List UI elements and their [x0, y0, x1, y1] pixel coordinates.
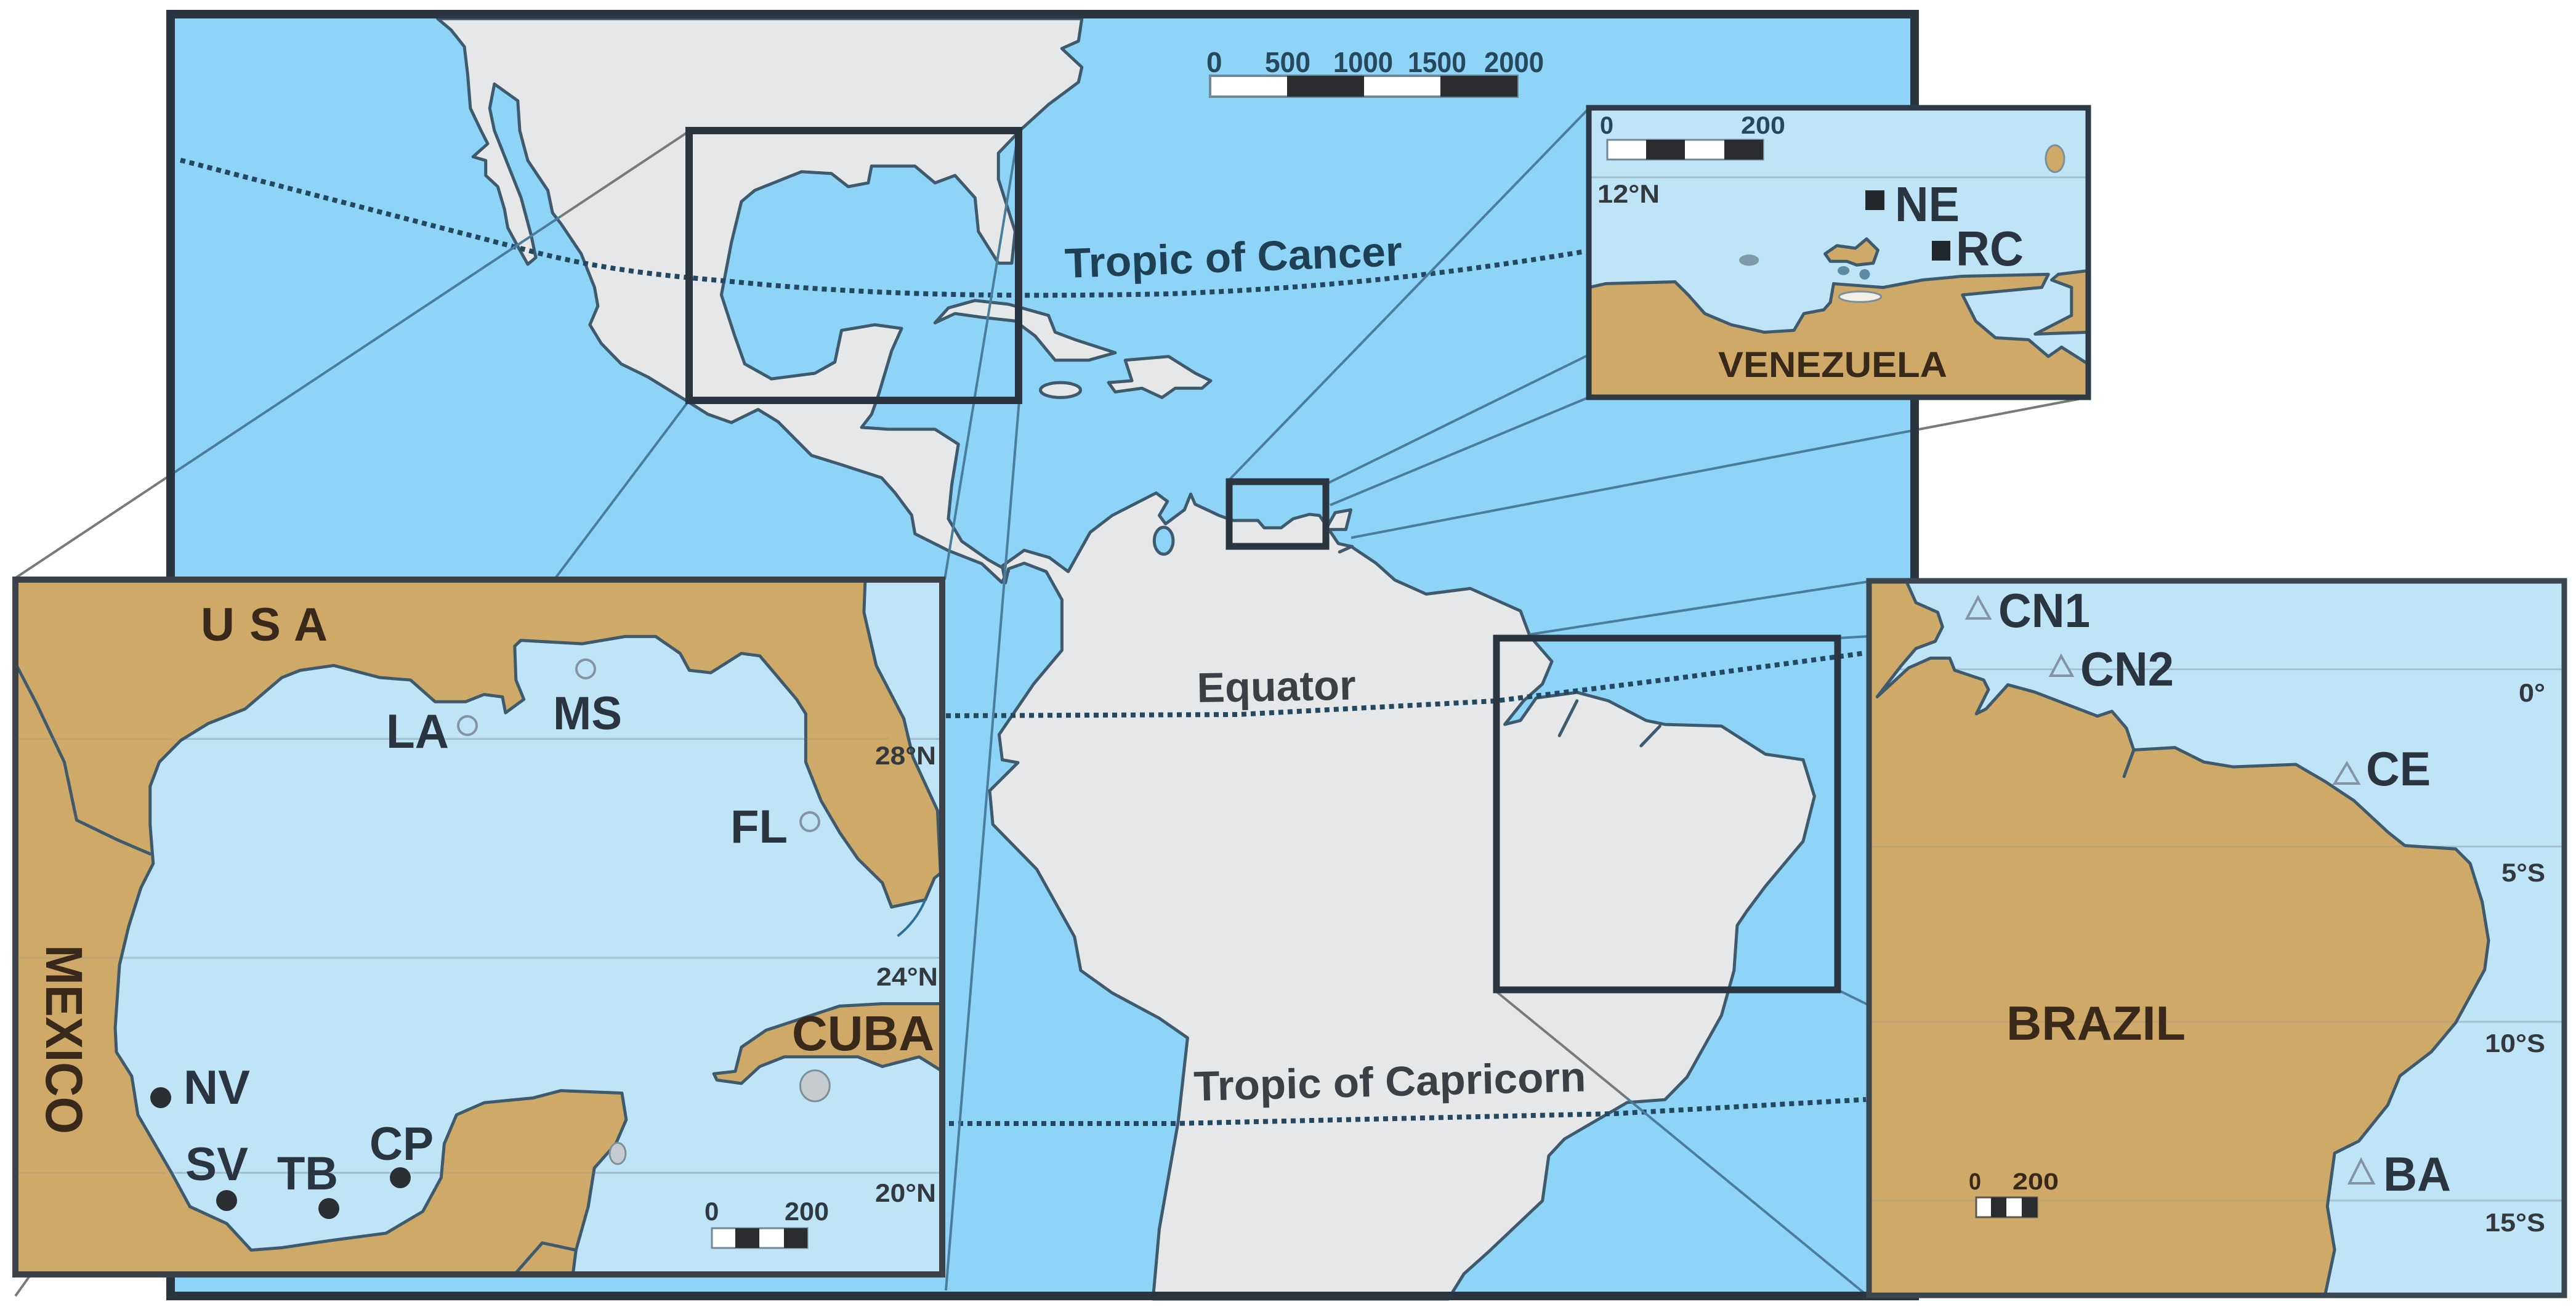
site: CN2: CN2	[2080, 642, 2174, 696]
label: Tropic of Cancer: Tropic of Cancer	[1064, 228, 1403, 287]
scale bar: Venezuela inset: 200	[1741, 112, 1785, 139]
label: Cuba: CUBA	[792, 1006, 934, 1061]
latitude labels: 10°S	[2485, 1029, 2545, 1058]
latitude labels	[875, 741, 938, 1207]
site: BA: BA	[2383, 1147, 2451, 1201]
land: USA, Mexico and Florida	[15, 580, 942, 1274]
tropic of cancer line	[180, 160, 1586, 295]
site: CN1: CN1	[1998, 583, 2090, 638]
latitude labels: 28°N	[875, 741, 936, 770]
scale bar: main map	[1206, 46, 1544, 97]
site: NV	[150, 1060, 250, 1114]
scale bar: main map: 500	[1265, 46, 1310, 78]
site: MS: MS	[553, 687, 622, 740]
panel: main map ocean	[171, 14, 1915, 1296]
site: LA: LA	[386, 704, 449, 758]
locator box: Venezuela	[1229, 482, 1326, 546]
land: Caribbean islands	[935, 301, 1211, 397]
equator line	[946, 653, 1866, 716]
zoom guide lines	[13, 108, 2088, 1296]
label: Equator: Equator	[1197, 662, 1356, 711]
site: TB: TB	[277, 1148, 338, 1200]
scale bar: main map: 1000	[1333, 46, 1393, 78]
site: CE	[2335, 742, 2431, 796]
site: RC: RC	[1956, 221, 2024, 276]
site: CP: CP	[369, 1118, 434, 1170]
scale bar: Gulf inset: 200	[785, 1197, 829, 1226]
site: NE: NE	[1895, 177, 1960, 232]
scale bar: main map: 0	[1206, 46, 1222, 78]
locator box: Brazil	[1496, 638, 1838, 990]
latitude labels: 24°N	[876, 962, 938, 991]
label: Mexico: MEXICO	[35, 945, 93, 1134]
site: BA	[2349, 1147, 2451, 1201]
land: South America	[990, 493, 1814, 1299]
latitude labels: 20°N	[875, 1178, 936, 1207]
scale bar: Gulf inset	[705, 1197, 829, 1248]
scale bar: Brazil inset: 200	[2013, 1169, 2059, 1195]
label: Brazil: BRAZIL	[2006, 996, 2186, 1050]
latitude label: 12N: 12°N	[1597, 179, 1660, 208]
land: Brazil	[1869, 581, 2564, 1295]
inset frame	[1589, 108, 2088, 397]
latitude labels: 15°S	[2485, 1208, 2545, 1237]
scale bar: Venezuela inset: 0	[1600, 112, 1613, 139]
land: Venezuela coast and islands	[1589, 145, 2088, 397]
scale bar: Brazil inset: 0	[1969, 1169, 1981, 1195]
panel: Venezuela inset	[1589, 108, 2088, 397]
inset frame	[15, 580, 942, 1274]
site: NV: NV	[184, 1060, 250, 1114]
scale bar: main map: 1500	[1408, 46, 1466, 78]
label: Tropic of Capricorn: Tropic of Capricorn	[1193, 1053, 1586, 1110]
site: SV: SV	[185, 1138, 248, 1191]
label: USA: U S A	[201, 599, 328, 651]
site: FL: FL	[730, 801, 788, 853]
site: NE	[1865, 177, 1960, 232]
tropic of capricorn line	[949, 1099, 1866, 1124]
site: CE: CE	[2366, 742, 2431, 796]
latitude labels: 0°	[2519, 678, 2545, 707]
scale bar: Brazil inset	[1969, 1169, 2059, 1217]
main map frame	[171, 14, 1915, 1296]
scale bar: Venezuela inset	[1600, 112, 1785, 160]
scale bar: main map: 2000	[1484, 46, 1544, 78]
scale bar: Gulf inset: 0	[705, 1197, 719, 1226]
locator box: Gulf of Mexico	[689, 131, 1019, 400]
panel: Brazil inset	[1869, 581, 2564, 1295]
label: Venezuela: VENEZUELA	[1718, 345, 1947, 385]
site: MS	[553, 660, 622, 740]
latitude labels: 5°S	[2501, 858, 2545, 887]
land: North and Central America	[438, 18, 1082, 582]
panel: Gulf of Mexico inset	[15, 580, 942, 1274]
inset frame	[1869, 581, 2564, 1295]
latitude labels	[2485, 678, 2545, 1237]
site: FL	[730, 801, 819, 853]
